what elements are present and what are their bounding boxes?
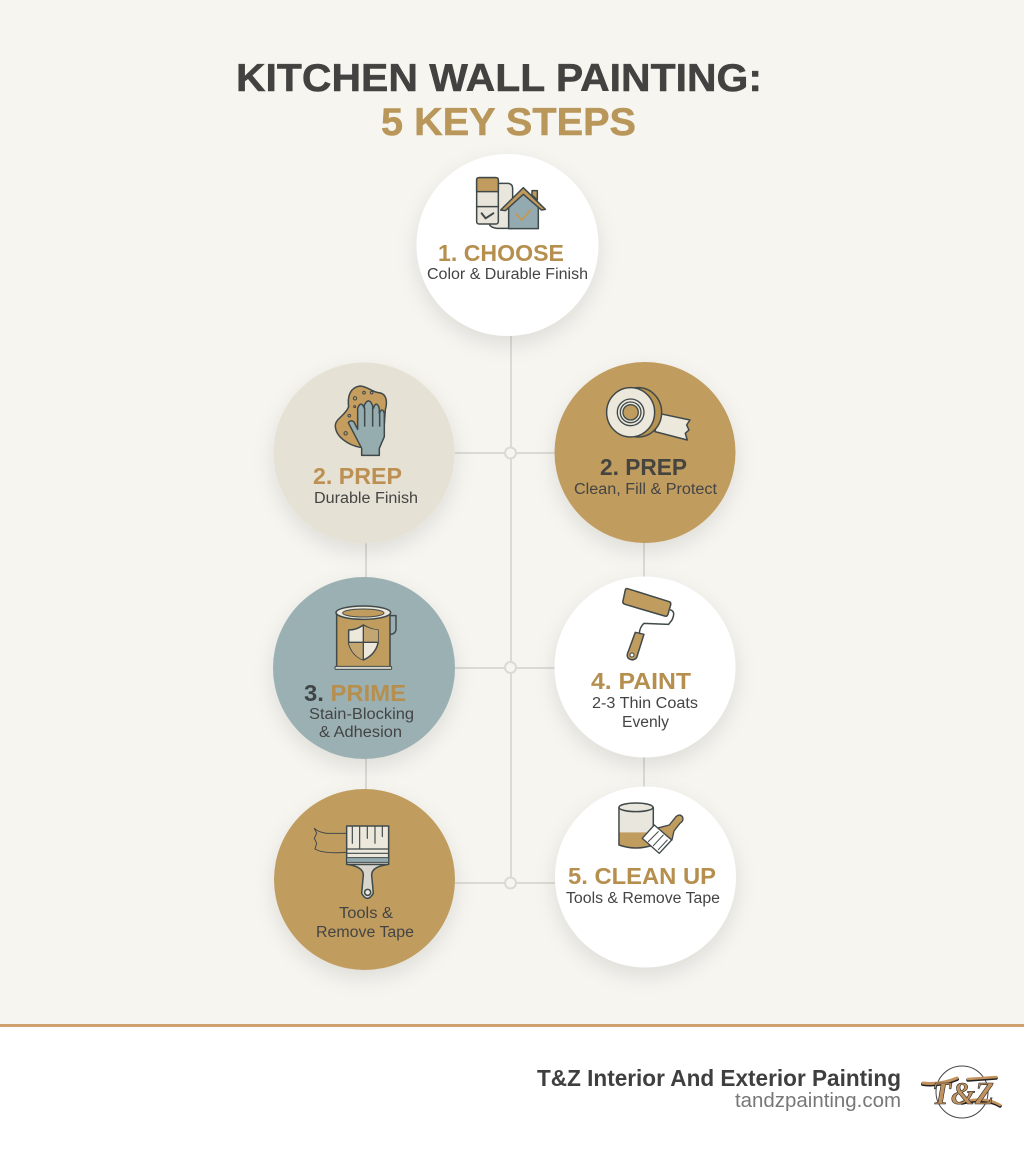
title: 5 KEY STEPS xyxy=(381,101,636,144)
text: stain blocking and adhesion: & Adhesion xyxy=(319,724,402,741)
heading: 2. prep: 2. PREP xyxy=(600,454,687,480)
icon: company logo: T&Z xyxy=(932,1075,994,1111)
text: stain blocking and adhesion xyxy=(309,706,414,741)
text: tools and remove tape: Tools & xyxy=(339,905,394,922)
text: company name: T&Z Interior And Exterior Painting xyxy=(537,1065,901,1091)
panel: step 2 prep right xyxy=(554,362,736,543)
text: thin coats: Evenly xyxy=(622,714,669,731)
text: thin coats: 2-3 Thin Coats xyxy=(592,695,698,712)
title xyxy=(236,57,762,144)
text: clean fill protect: Clean, Fill & Protect xyxy=(574,481,718,498)
connector lines xyxy=(366,336,644,888)
text: color and durable finish: Color & Durable Finish xyxy=(427,266,588,283)
footer xyxy=(0,1024,1024,1154)
text: tools and remove tape: Remove Tape xyxy=(316,924,414,941)
heading: 1. choose: 1. CHOOSE xyxy=(438,240,564,266)
icon: sponge and glove xyxy=(335,386,386,455)
text: website: tandzpainting.com xyxy=(735,1090,901,1112)
heading: 5. clean up: 5. CLEAN UP xyxy=(568,863,716,889)
panel: step 5 tools left xyxy=(274,789,455,970)
text: tools and remove tape: Tools & Remove Tape xyxy=(566,890,720,907)
icon: tape roll xyxy=(607,388,690,440)
panel: step 4 paint xyxy=(554,576,736,758)
panel: step 2 prep left xyxy=(274,362,454,544)
panel: step 1 choose xyxy=(416,154,598,336)
icon: swatches and house xyxy=(477,178,545,229)
text: durable finish: Durable Finish xyxy=(314,490,418,507)
panel: step 5 clean up xyxy=(555,786,736,968)
icon: primer can with shield xyxy=(335,606,396,669)
text: tools and remove tape xyxy=(316,905,414,941)
icon: brush and tape xyxy=(314,826,389,898)
panel: step 3 prime xyxy=(273,577,455,759)
icon: can and brush xyxy=(619,803,683,853)
heading: 4. paint: 4. PAINT xyxy=(591,668,692,694)
text: stain blocking and adhesion: Stain-Blocking xyxy=(309,706,414,723)
text: thin coats xyxy=(592,695,698,731)
icon: company logo xyxy=(923,1066,1000,1118)
heading: 2. prep: 2. PREP xyxy=(313,463,402,489)
icon: paint roller xyxy=(623,588,674,660)
heading: 3. prime: 3. PRIME xyxy=(304,680,406,706)
title: KITCHEN WALL PAINTING: xyxy=(236,57,762,100)
